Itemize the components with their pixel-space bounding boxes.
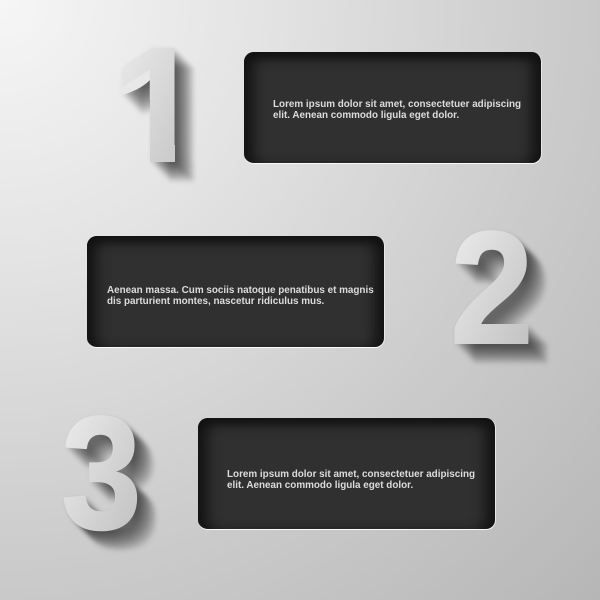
panel 3 text: elit. Aenean commodo ligula eget dolor. — [227, 480, 413, 491]
panel 1 — [244, 52, 542, 164]
panel 3 text: Lorem ipsum dolor sit amet, consectetuer adipiscing — [227, 469, 475, 480]
panel 1 text: Lorem ipsum dolor sit amet, consectetuer adipiscing — [273, 99, 521, 110]
numeral 2 with long shadow: 2 — [450, 198, 533, 377]
panel 2 text: Aenean massa. Cum sociis natoque penatibus et magnis — [107, 285, 374, 296]
panel 1 text — [273, 99, 521, 121]
numeral 3 with long shadow: 3 — [61, 384, 141, 563]
panel 2 text: dis parturient montes, nascetur ridiculus mus. — [107, 296, 324, 307]
panel 3 — [198, 418, 496, 530]
numeral 1 with long shadow: 1 — [112, 14, 204, 199]
panel 3 text — [227, 469, 475, 491]
panel 2 text — [107, 285, 374, 307]
panel 1 text: elit. Aenean commodo ligula eget dolor. — [273, 110, 459, 121]
panel 2 — [87, 236, 385, 348]
numeral 1 with long shadow — [122, 48, 196, 182]
